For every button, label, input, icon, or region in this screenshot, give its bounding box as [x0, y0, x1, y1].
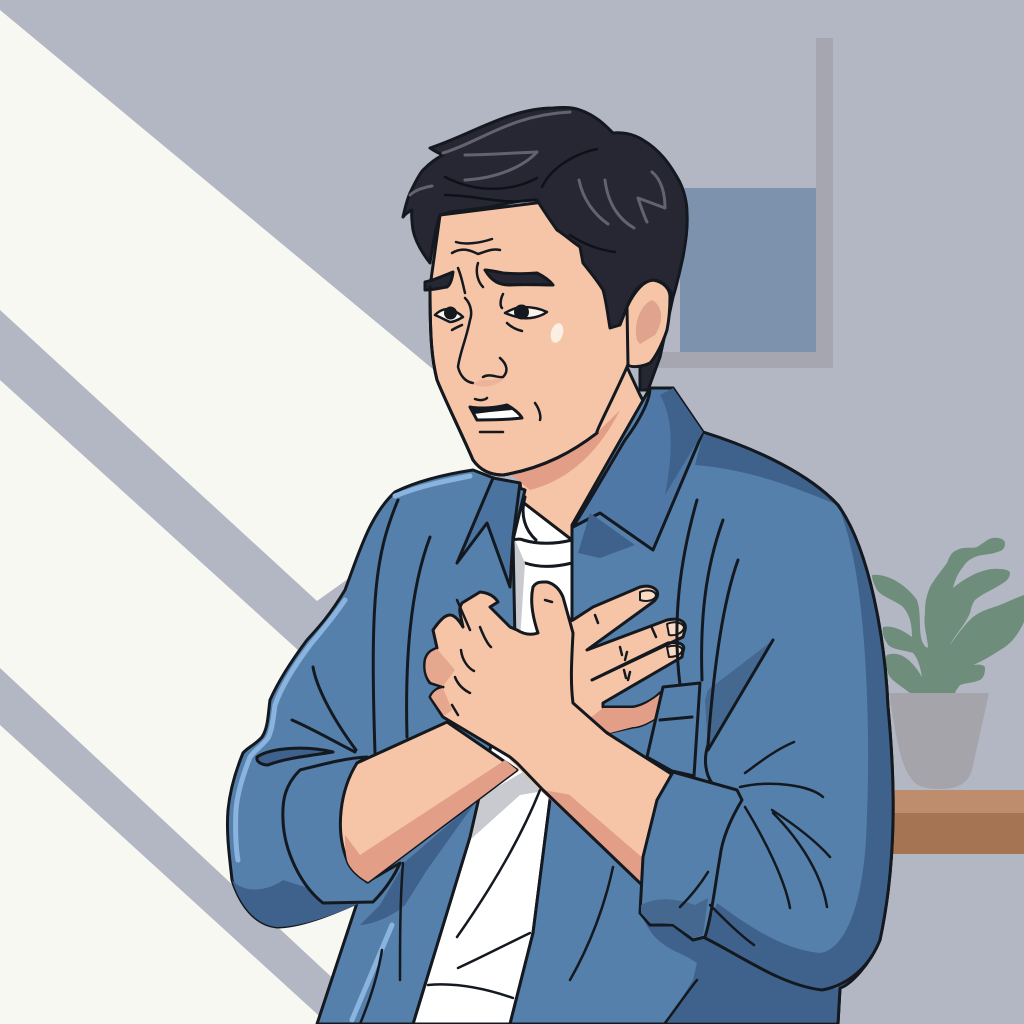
t-shirt shadows	[470, 540, 550, 840]
chest pocket	[647, 683, 700, 776]
neck shadow	[510, 410, 620, 490]
forehead wrinkles	[452, 239, 500, 293]
hair highlights	[410, 112, 665, 228]
clasped hand fill	[425, 582, 640, 800]
right side outline	[703, 432, 893, 1024]
pupils	[444, 305, 529, 320]
cuff shadow	[641, 898, 708, 938]
clasped hand outline	[425, 582, 673, 885]
shadow beneath sleeve	[642, 915, 840, 1022]
sleeve highlight	[236, 476, 470, 1020]
shirt: right side of body	[510, 388, 893, 1024]
hair	[403, 108, 687, 328]
jaw outline	[430, 287, 597, 475]
left sleeve shadow	[232, 880, 372, 927]
body shadow under elbow	[360, 800, 477, 925]
eyebrows	[425, 270, 553, 290]
far hand with fingers	[560, 586, 685, 733]
hair behind ear	[640, 297, 673, 390]
eyes	[435, 307, 547, 322]
finger nails	[640, 590, 684, 657]
under eye and brow creases	[452, 294, 522, 331]
hair strand lines	[445, 149, 615, 252]
left sleeve cuff	[283, 757, 400, 903]
sleeve seam shadow	[705, 640, 773, 750]
left collar	[457, 478, 520, 587]
chest fold lines	[677, 500, 773, 783]
knuckle lines	[452, 600, 656, 715]
sleeve shadow band	[703, 505, 893, 990]
right forearm	[500, 700, 673, 885]
t-shirt	[413, 500, 572, 1024]
wooden shelf	[880, 790, 1024, 854]
neck	[520, 367, 655, 540]
highlight on cheek	[549, 322, 565, 344]
mouth	[470, 405, 522, 420]
hand shadow	[426, 649, 455, 716]
right collar	[573, 388, 703, 550]
far palm shadow	[590, 694, 660, 733]
figure	[227, 108, 893, 1024]
left sleeve fold	[257, 748, 333, 765]
collar shadow	[660, 388, 703, 495]
shoulder shadow	[695, 434, 838, 505]
right sleeve cuff	[640, 772, 742, 940]
head and face	[430, 195, 640, 475]
upper lip	[470, 405, 512, 414]
shirt: left side of body and arm	[227, 470, 525, 1024]
shirt fold lines	[360, 742, 830, 1024]
t-shirt neckband	[513, 497, 572, 566]
inner ear	[636, 300, 661, 344]
under collar shadow	[578, 513, 635, 558]
left forearm	[340, 722, 517, 882]
chest shadow lines	[292, 500, 430, 753]
ear	[627, 280, 670, 367]
left forearm shadow	[345, 760, 517, 882]
diagonal light beams	[0, 10, 500, 1024]
nose	[458, 298, 506, 383]
right forearm shadow	[540, 785, 645, 885]
wall picture frame	[650, 38, 833, 368]
nose shadow	[473, 378, 505, 387]
lip marks and cheek crease	[475, 398, 540, 432]
potted plant	[872, 538, 1024, 789]
